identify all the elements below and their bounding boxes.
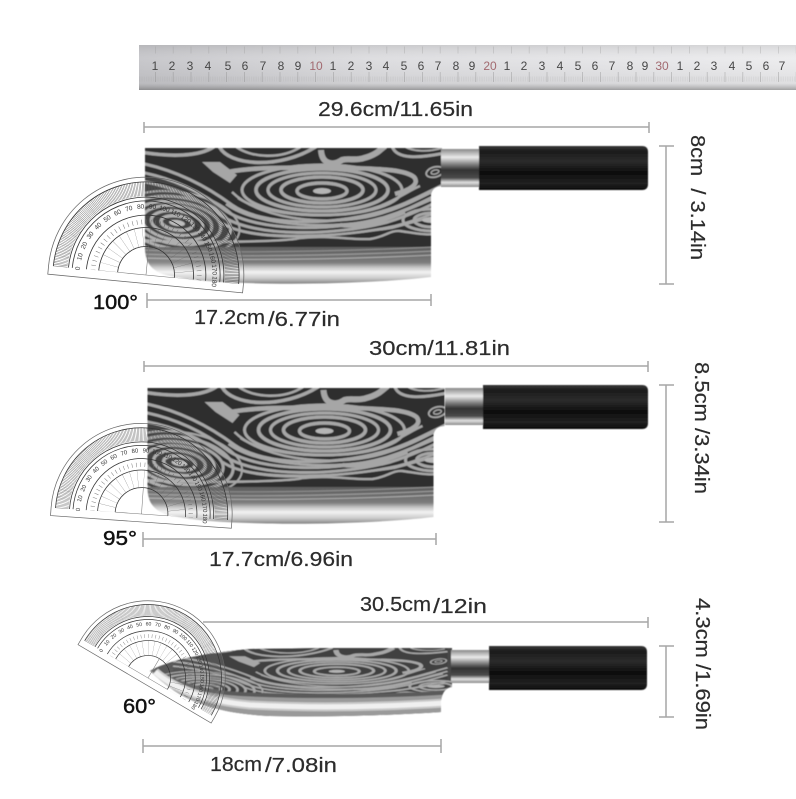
ruler xyxy=(139,45,796,90)
ruler: 4 xyxy=(557,59,564,73)
protractor 2: 20 xyxy=(80,484,89,493)
protractor 1: 110 xyxy=(169,208,182,219)
protractor 3: 30 xyxy=(118,627,126,635)
ruler: 7 xyxy=(779,59,786,73)
knife 3 angle label: 60° xyxy=(123,696,156,718)
ruler: 5 xyxy=(225,59,232,73)
ruler: 5 xyxy=(401,59,408,73)
knife 3 total length label: 30.5cm xyxy=(360,594,431,616)
protractor 1: 80 xyxy=(137,203,145,211)
knife 1 measurements xyxy=(93,99,708,331)
knife 2 angle label: 95° xyxy=(103,528,137,550)
protractor 3: 10 xyxy=(103,639,112,647)
protractor 1: 120 xyxy=(179,214,192,226)
protractor 1: 150 xyxy=(202,240,213,254)
knife 2 bolster xyxy=(445,388,483,425)
protractor 1: 90 xyxy=(149,203,157,211)
protractor 3: 150 xyxy=(198,674,205,683)
ruler: 2 xyxy=(521,59,528,73)
knife 3 measurements xyxy=(123,594,713,777)
knife 1 blade length label: 17.2cm xyxy=(194,307,265,329)
knife 2 blade length label: 17.7cm/6.96in xyxy=(209,549,353,571)
knife 3 blade xyxy=(150,647,453,718)
knife 2 height dimension line xyxy=(659,385,674,522)
protractor 2: 60 xyxy=(110,453,119,462)
ruler: 8 xyxy=(278,59,285,73)
ruler: 9 xyxy=(295,59,302,73)
protractor 1: 50 xyxy=(103,214,113,224)
protractor 1: 130 xyxy=(188,221,201,234)
protractor 2: 150 xyxy=(193,481,203,493)
knife 3 height dimension line xyxy=(659,646,674,717)
knife 2 height label: 8.5cm /3.34in xyxy=(690,362,712,494)
knife 3 bolster xyxy=(451,650,489,683)
ruler: 6 xyxy=(763,59,770,73)
protractor 3: 80 xyxy=(163,624,171,632)
knife 3 blade length label: 18cm xyxy=(210,754,262,776)
ruler: 2 xyxy=(348,59,355,73)
ruler: 3 xyxy=(366,59,373,73)
protractor 2: 110 xyxy=(161,452,173,462)
protractor 1: 170 xyxy=(210,264,218,276)
protractor 2: 140 xyxy=(187,471,198,484)
protractor 2: 10 xyxy=(77,494,85,503)
knife 1 angle label: 100° xyxy=(93,292,138,314)
ruler: 3 xyxy=(711,59,718,73)
ruler: 5 xyxy=(575,59,582,73)
ruler: 6 xyxy=(418,59,425,73)
protractor 1: 160 xyxy=(207,252,217,264)
protractor 3: 160 xyxy=(197,683,204,693)
protractor 3: 20 xyxy=(110,632,118,641)
protractor 2: 160 xyxy=(197,491,206,503)
ruler: 6 xyxy=(242,59,249,73)
knife 2 total length label: 30cm/11.81in xyxy=(369,338,510,360)
protractor 2: 130 xyxy=(179,463,191,475)
ruler: 7 xyxy=(260,59,267,73)
protractor 2: 120 xyxy=(171,457,183,468)
protractor 2: 90 xyxy=(142,448,150,455)
knife 3 blade length inches: /7.08in xyxy=(265,755,337,777)
knife 1 blade length inches: /6.77in xyxy=(268,309,340,331)
knife 1 total length label: 29.6cm/11.65in xyxy=(318,99,473,121)
protractor 3: 170 xyxy=(194,692,202,702)
protractor 1: 10 xyxy=(76,252,85,261)
knife 1 height label: 8cm / 3.14in xyxy=(686,135,708,260)
protractor 1: 30 xyxy=(86,230,96,240)
protractor 3: 100 xyxy=(178,632,188,642)
knife 3 blade dimension line xyxy=(143,739,441,753)
ruler: 1 xyxy=(677,59,684,73)
protractor 3 xyxy=(78,572,254,723)
protractor 3: 70 xyxy=(154,622,161,629)
ruler: 6 xyxy=(592,59,599,73)
knife 3 length dimension line xyxy=(203,617,648,628)
ruler: 5 xyxy=(746,59,753,73)
protractor 1: 100 xyxy=(158,205,171,214)
knife 1: cleaver xyxy=(110,144,648,287)
ruler: 2 xyxy=(694,59,701,73)
protractor 2: 40 xyxy=(92,466,101,475)
protractor 1: 140 xyxy=(196,230,208,243)
protractor 1: 60 xyxy=(113,208,123,218)
protractor 3: 180 xyxy=(189,700,199,710)
ruler: 4 xyxy=(205,59,212,73)
knife 2: wide cleaver xyxy=(113,384,648,527)
protractor 1: 0 xyxy=(75,266,82,271)
ruler: 30 xyxy=(655,59,669,73)
protractor 2 xyxy=(51,417,238,528)
ruler: 9 xyxy=(469,59,476,73)
protractor 3: 60 xyxy=(146,621,151,628)
ruler: 3 xyxy=(187,59,194,73)
knife 1 handle xyxy=(479,146,648,190)
protractor 2: 70 xyxy=(120,450,129,458)
protractor 2: 180 xyxy=(201,513,207,524)
ruler: 3 xyxy=(539,59,546,73)
knife 2 blade xyxy=(146,387,446,524)
protractor 3: 110 xyxy=(184,639,194,649)
knife 1 height dimension line xyxy=(659,146,674,284)
knife 1 bolster xyxy=(441,149,479,187)
protractor 1 xyxy=(48,168,253,293)
ruler: 4 xyxy=(383,59,390,73)
ruler: 7 xyxy=(435,59,442,73)
knife 3 total length inches: /12in xyxy=(433,596,487,618)
ruler: 9 xyxy=(642,59,649,73)
ruler: 2 xyxy=(169,59,176,73)
protractor 1: 70 xyxy=(125,205,134,213)
protractor 2: 0 xyxy=(76,507,82,512)
knife 2 length dimension line xyxy=(144,361,648,372)
knife 2 blade dimension line xyxy=(143,532,436,547)
protractor 2: 80 xyxy=(131,448,139,455)
protractor 3: 130 xyxy=(194,655,203,665)
protractor 3: 50 xyxy=(136,622,143,629)
knife 3 height label: 4.3cm /1.69in xyxy=(691,598,713,730)
ruler: 8 xyxy=(453,59,460,73)
protractor 3: 140 xyxy=(197,664,204,674)
protractor 2: 30 xyxy=(85,474,94,483)
knife 1 blade xyxy=(144,147,442,284)
protractor 2: 170 xyxy=(200,502,207,513)
knife 3: chef knife xyxy=(145,644,647,720)
protractor 1: 180 xyxy=(210,276,218,288)
ruler: 8 xyxy=(627,59,634,73)
protractor 3: 90 xyxy=(171,628,179,636)
knife 2 handle xyxy=(483,385,648,429)
protractor 2: 100 xyxy=(151,449,163,458)
knife 3 handle xyxy=(489,646,647,690)
ruler: 1 xyxy=(504,59,511,73)
ruler: 1 xyxy=(330,59,337,73)
ruler: 1 xyxy=(152,59,159,73)
knife 1 blade dimension line xyxy=(147,293,431,308)
protractor 1: 20 xyxy=(80,241,90,250)
protractor 3: 0 xyxy=(99,648,105,654)
ruler: 4 xyxy=(729,59,736,73)
knife 2 measurements xyxy=(103,338,712,571)
knife 1 length dimension line xyxy=(144,122,649,133)
ruler: 7 xyxy=(609,59,616,73)
protractor 2: 50 xyxy=(100,459,110,468)
protractor 3: 40 xyxy=(126,624,134,631)
ruler: 20 xyxy=(483,59,497,73)
protractor 3: 120 xyxy=(190,646,199,657)
ruler: 10 xyxy=(309,59,323,73)
protractor 1: 40 xyxy=(93,221,104,232)
